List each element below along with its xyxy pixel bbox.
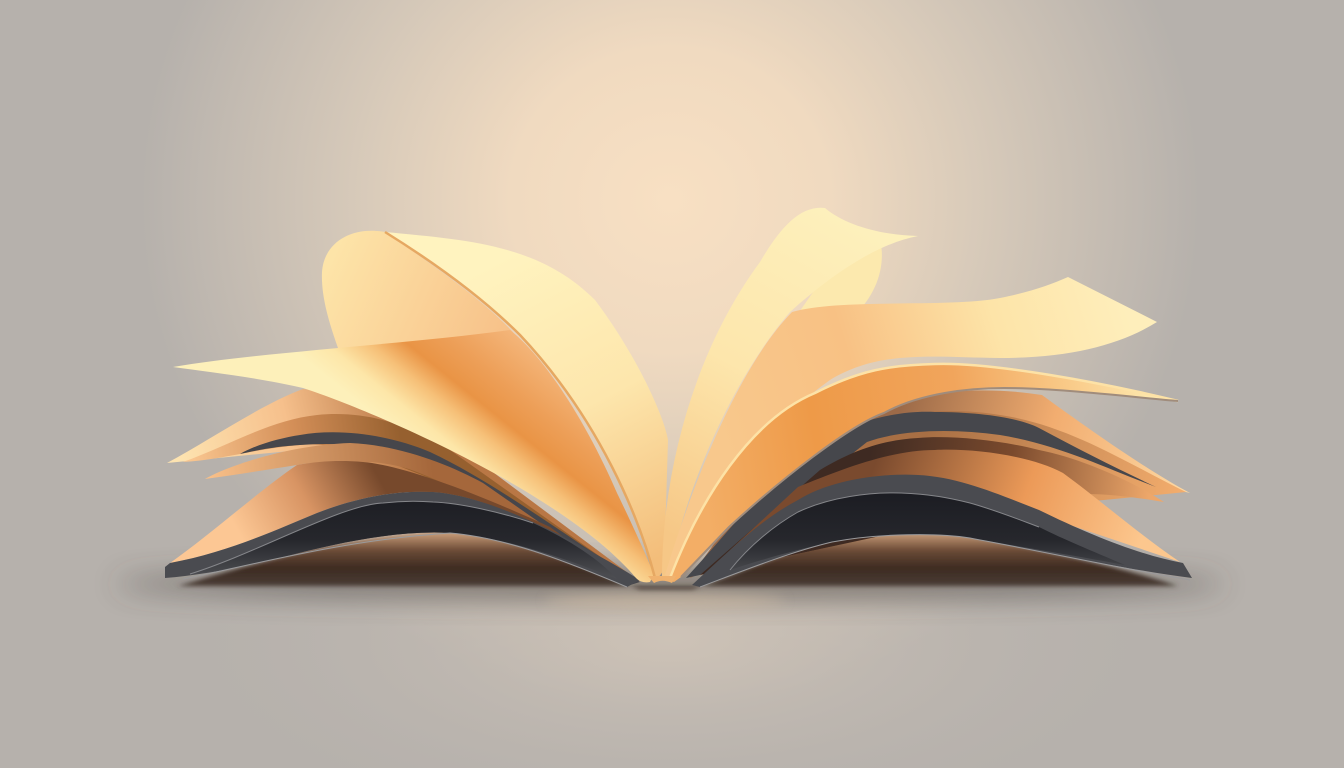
left curled page outer face: [385, 232, 668, 582]
left dark band: [240, 432, 640, 585]
left lower peach page: [170, 461, 625, 582]
right upper peach page: [690, 390, 1190, 578]
left small page: [205, 443, 625, 582]
right page stack: [686, 390, 1192, 587]
right next fanned page: [668, 364, 1178, 582]
left page stack: [165, 389, 640, 587]
left big fanned page: [173, 330, 654, 582]
left orange inner page: [183, 414, 636, 582]
right back curl: [790, 244, 882, 325]
ground shadow: [115, 531, 1225, 608]
right orange inner page: [700, 411, 1186, 575]
right small brown page: [700, 437, 1164, 575]
right dark page block: [692, 475, 1192, 587]
left dark page block: [165, 492, 640, 587]
right flying page: [665, 277, 1157, 578]
left curled page inner face: [322, 231, 520, 350]
right dark band: [686, 412, 1156, 578]
right tall curled page: [662, 208, 918, 578]
left upper peach page: [167, 389, 640, 582]
spine fold at centre of book: [648, 576, 676, 583]
right lower peach page: [730, 450, 1180, 562]
